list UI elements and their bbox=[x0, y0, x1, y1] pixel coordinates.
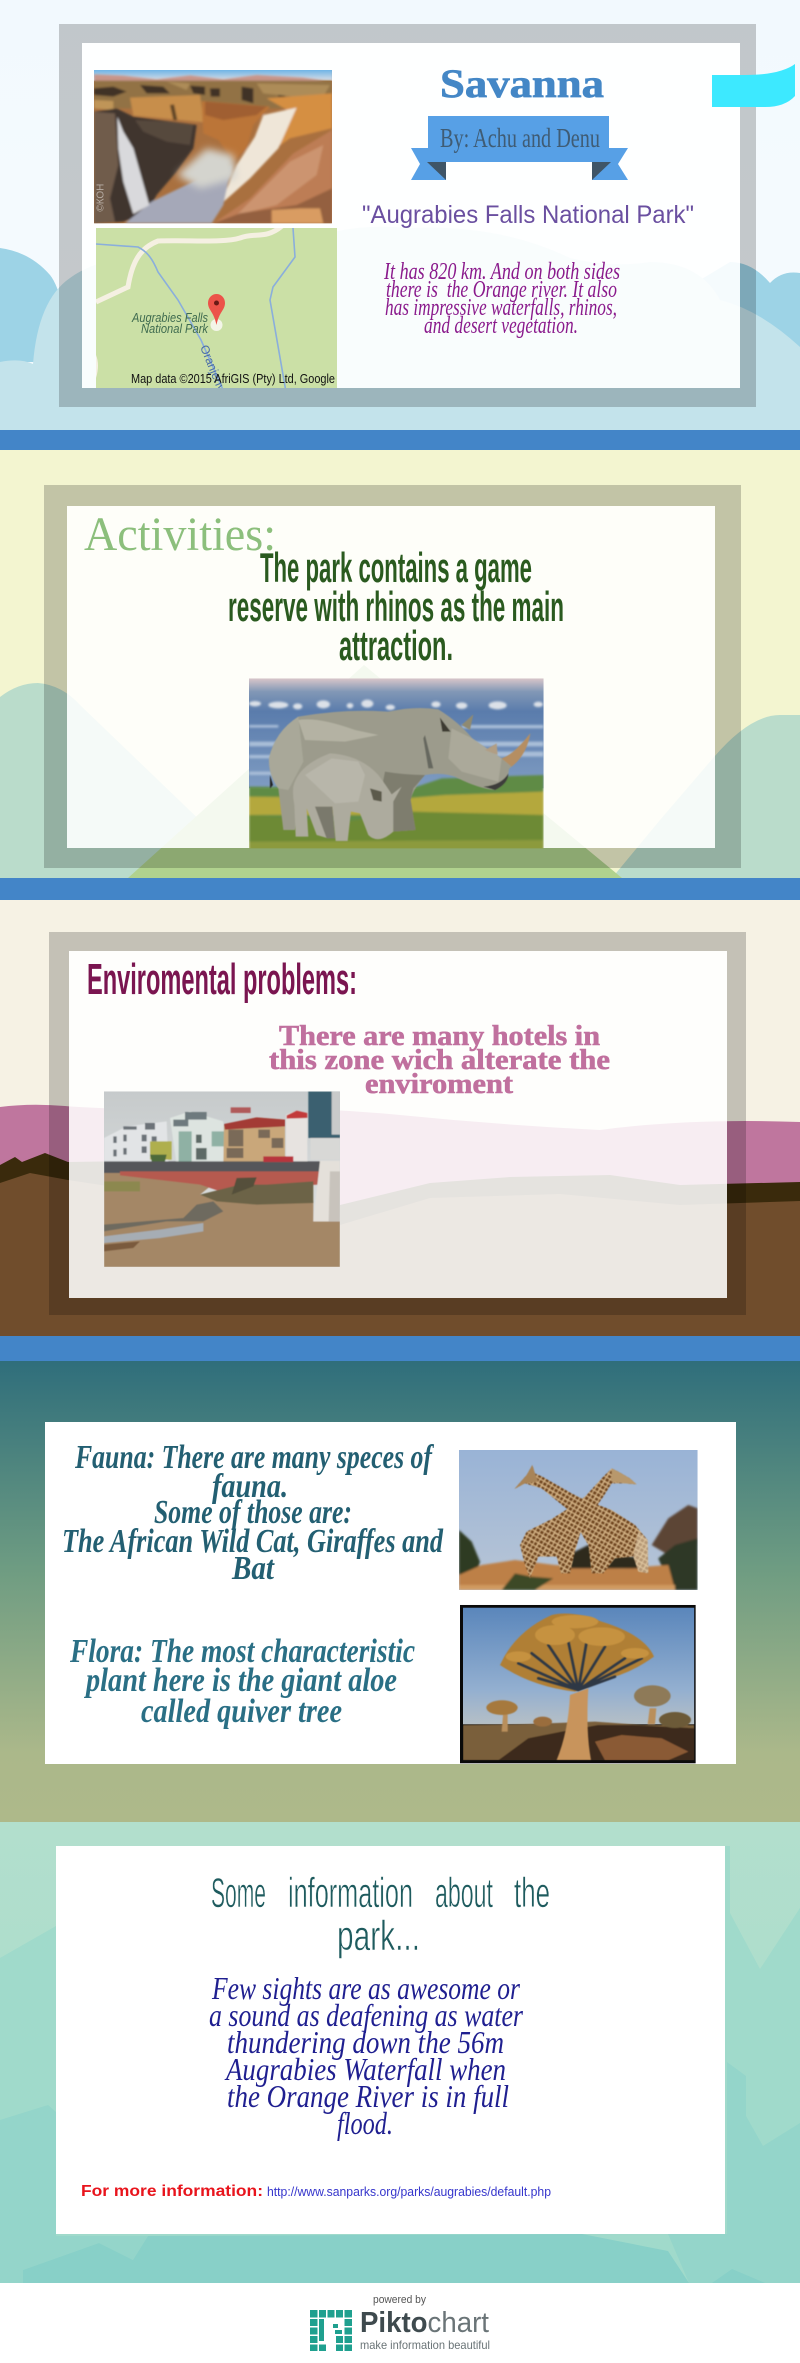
heading: some information: Some bbox=[211, 1869, 266, 1916]
big rhino bbox=[269, 708, 530, 832]
section: fauna and flora background bbox=[0, 1361, 800, 1822]
icon: cyan flag bbox=[712, 64, 795, 107]
map: attribution: Map data ©2015 AfriGIS (Pty) Ltd, Google bbox=[131, 371, 335, 386]
map: road fragment bbox=[96, 355, 98, 378]
heading: activities: Activities: bbox=[84, 508, 276, 561]
heading: environmental problems: Enviromental problems: bbox=[87, 955, 357, 1004]
text: fauna: Fauna: There are many speces of bbox=[74, 1439, 435, 1476]
waterfall mist bbox=[177, 148, 237, 188]
text: game reserve: The park contains a game bbox=[260, 544, 532, 591]
text: flora: plant here is the giant aloe bbox=[83, 1662, 397, 1699]
text: hotels: this zone wich alterate the bbox=[269, 1045, 610, 1076]
ribbon: authors: By: Achu and Denu bbox=[440, 123, 600, 153]
panel: park information bbox=[56, 1846, 725, 2234]
heading: some information: the bbox=[514, 1869, 550, 1916]
section: environmental problems background bbox=[0, 900, 800, 1336]
map: Augrabies Falls location bbox=[96, 228, 337, 388]
divider band 3 bbox=[0, 1336, 800, 1361]
section: environmental problems frame bbox=[49, 932, 746, 1315]
panel: environmental problems bbox=[69, 951, 727, 1298]
photo: quiver tree bbox=[460, 1605, 696, 1763]
map: river label: Oranjerivier bbox=[197, 343, 233, 406]
section: activities frame bbox=[44, 485, 741, 868]
text: fauna: Some of those are: bbox=[154, 1494, 352, 1531]
logo tagline: make information beautiful bbox=[360, 2338, 490, 2352]
title: Savanna bbox=[440, 61, 604, 106]
heading: some information: about bbox=[435, 1869, 493, 1916]
park name: "Augrabies Falls National Park" bbox=[362, 201, 694, 229]
section: park intro frame bbox=[59, 24, 756, 407]
divider band 2 bbox=[0, 878, 800, 900]
heading: some information bbox=[211, 1869, 550, 1959]
panel: park intro bbox=[82, 43, 740, 388]
text: fauna: The African Wild Cat, Giraffes and bbox=[62, 1523, 444, 1560]
text: fauna: fauna. bbox=[212, 1468, 288, 1505]
text: waterfall description: Few sights are as awesome or bbox=[211, 1970, 520, 2006]
footer: powered by: powered by bbox=[373, 2294, 426, 2306]
description: park facts: It has 820 km. And on both sides bbox=[383, 259, 620, 285]
heading: some information: information bbox=[288, 1869, 413, 1916]
text: waterfall description: thundering down the 56m bbox=[227, 2024, 504, 2060]
text: waterfall description: a sound as deafening as water bbox=[209, 1997, 523, 2033]
photo: Augrabies waterfall bbox=[94, 70, 332, 223]
text: website address: http://www.sanparks.org/parks/augrabies/default.php bbox=[267, 2184, 551, 2199]
logo wordmark: Piktochart bbox=[360, 2307, 489, 2339]
map: rivers bbox=[96, 228, 295, 392]
section: park intro background bbox=[0, 0, 800, 430]
map: location label: National Park bbox=[141, 322, 209, 336]
text: hotels: There are many hotels in bbox=[279, 1021, 600, 1052]
panel: fauna and flora bbox=[45, 1422, 736, 1764]
map: location label bbox=[132, 312, 208, 333]
baby rhino bbox=[293, 753, 402, 841]
text: flora bbox=[69, 1633, 415, 1730]
text: flora: called quiver tree bbox=[141, 1693, 342, 1730]
map: location label: Augrabies Falls bbox=[131, 311, 208, 325]
panel: activities bbox=[67, 506, 715, 848]
text: fauna: Bat bbox=[231, 1550, 275, 1587]
map: road bbox=[96, 226, 282, 302]
text: hotels: enviroment bbox=[365, 1069, 514, 1100]
text: game reserve: attraction. bbox=[339, 622, 453, 669]
section: activities background bbox=[0, 450, 800, 878]
text: more information label: For more information: bbox=[81, 2183, 263, 2200]
footer: powered by Piktochart bbox=[0, 2283, 800, 2363]
quiver tree branches bbox=[518, 1642, 642, 1690]
photo: giraffes bbox=[459, 1450, 698, 1590]
icon: Piktochart logo bbox=[310, 2310, 352, 2351]
text: game reserve bbox=[228, 544, 564, 669]
heading: some information: park... bbox=[337, 1912, 420, 1959]
giraffe pair bbox=[514, 1465, 648, 1578]
text: waterfall description: Augrabies Waterfall when bbox=[224, 2051, 506, 2087]
text: hotels bbox=[269, 1021, 610, 1100]
text: waterfall description bbox=[209, 1970, 523, 2141]
photo: rhinos bbox=[249, 678, 544, 850]
description: park facts: there is the Orange river. It also bbox=[386, 277, 617, 303]
photo: Augrabies waterfall: ©КОН bbox=[95, 184, 106, 212]
photo: hotels on the shore bbox=[104, 1091, 340, 1267]
text: fauna bbox=[62, 1439, 444, 1587]
ribbon: authors bbox=[411, 116, 628, 180]
text: flora: Flora: The most characteristic bbox=[69, 1633, 415, 1670]
description: park facts: has impressive waterfalls, rhinos, bbox=[385, 295, 617, 321]
divider band 1 bbox=[0, 430, 800, 450]
map: pin bbox=[208, 294, 225, 331]
description: park facts: and desert vegetation. bbox=[424, 313, 578, 339]
text: waterfall description: the Orange River is in full bbox=[227, 2078, 509, 2114]
text: waterfall description: flood. bbox=[337, 2105, 393, 2141]
description: park facts bbox=[383, 259, 620, 339]
section: park information background bbox=[0, 1822, 800, 2283]
